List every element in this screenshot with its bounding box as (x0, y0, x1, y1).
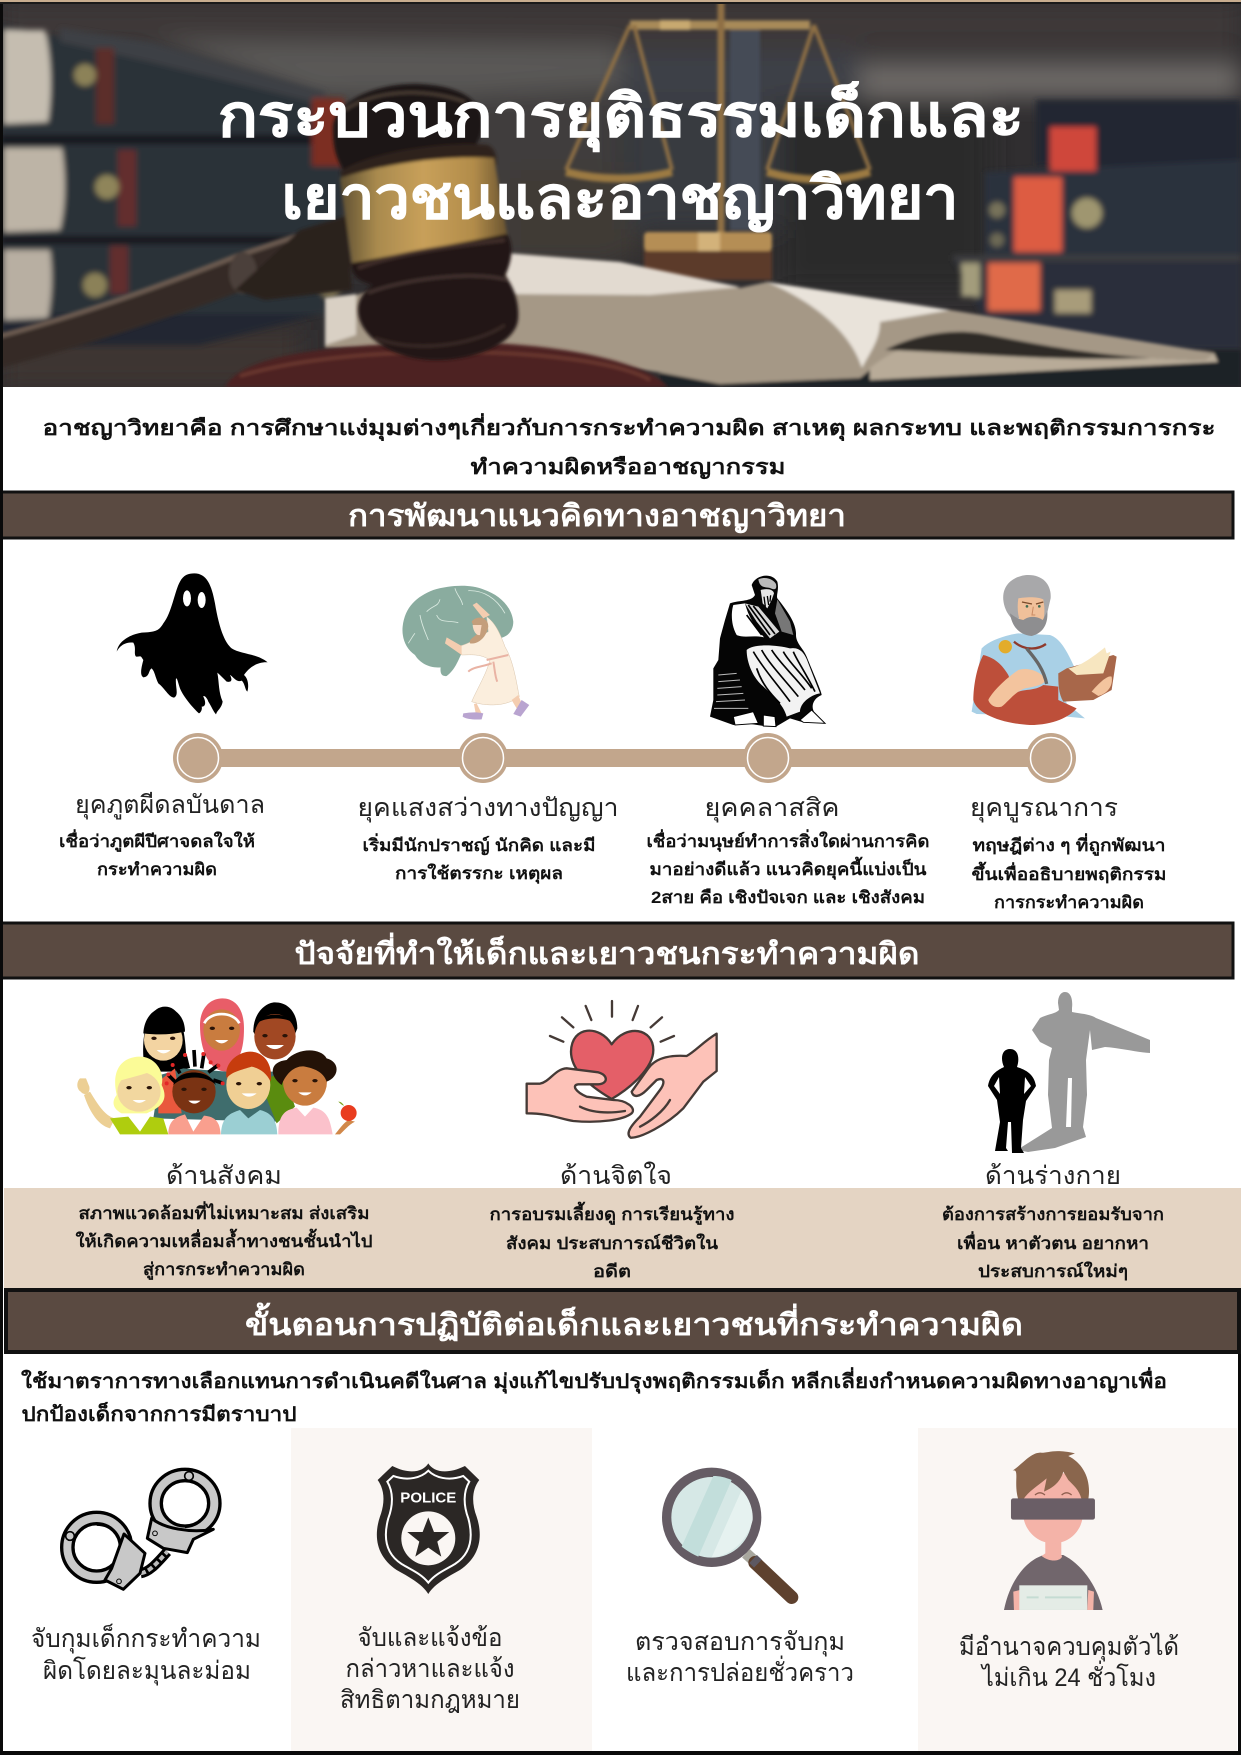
social description: สู่การกระทำความผิด (143, 1260, 305, 1281)
era 1 text: กระทำความผิด (97, 860, 217, 879)
title: เยาวชนและอาชญาวิทยา (282, 166, 958, 232)
band: factor descriptions (4, 1188, 1241, 1288)
icon: seated classical philosopher statue (710, 576, 825, 727)
milestone 1 (173, 733, 223, 783)
milestone 3 (743, 733, 793, 783)
step 4 label (959, 1632, 1179, 1692)
step 1 label: ผิดโดยละมุนละม่อม (43, 1656, 251, 1686)
heading: concept development: การพัฒนาแนวคิดทางอาชญาวิทยา (348, 500, 846, 534)
step 4 label: มีอำนาจควบคุมตัวได้ (959, 1632, 1179, 1662)
intro text: ทำความผิดหรืออาชญากรรม (470, 455, 786, 480)
title (218, 81, 1024, 232)
open book (325, 253, 1241, 387)
icon: child with superhero shadow (988, 992, 1150, 1153)
icon: police badge (377, 1463, 480, 1594)
icon: person pushing a brain (402, 586, 529, 720)
label: physical: ด้านร่างกาย (985, 1162, 1121, 1190)
heading: factors: ปัจจัยที่ทำให้เด็กและเยาวชนกระทำความผิด (294, 932, 920, 971)
icon: ancient scholar with book and quill (972, 575, 1117, 725)
era 4 text: ขึ้นเพื่ออธิบายพฤติกรรม (972, 861, 1166, 884)
era 2 text: ยุคแสงสว่างทางปัญญา (358, 794, 618, 823)
psychological description: สังคม ประสบการณ์ชีวิตใน (506, 1233, 718, 1253)
era 3 text: 2สาย คือ เชิงปัจเจก และ เชิงสังคม (651, 887, 925, 907)
right stacked books (953, 100, 1241, 350)
era 3 text: ยุคคลาสสิค (704, 794, 840, 823)
era 4 text: ทฤษฎีต่าง ๆ ที่ถูกพัฒนา (972, 833, 1166, 857)
icon: hands giving a heart (527, 1001, 717, 1138)
intro paragraph (21, 1366, 1167, 1426)
social description (76, 1201, 373, 1281)
era 3 text: มาอย่างดีแล้ว แนวคิดยุคนี้แบ่งเป็น (650, 856, 927, 880)
heading: procedures (6, 1290, 1239, 1352)
psychological description: การอบรมเลี้ยงดู การเรียนรู้ทาง (490, 1201, 734, 1226)
era 3 text: เชื่อว่ามนุษย์ทำการสิ่งใดผ่านการคิด (646, 829, 930, 852)
panel: procedures for young offenders (6, 1290, 1239, 1751)
step 3 label: ตรวจสอบการจับกุม (635, 1628, 845, 1657)
icon: police badge: POLICE (400, 1490, 457, 1506)
step 2 label: กล่าวหาและแจ้ง (346, 1655, 514, 1683)
physical description: เพื่อน หาตัวตน อยากหา (957, 1231, 1149, 1253)
era 3 text (646, 794, 930, 907)
heading: concept development (0, 492, 1233, 538)
gavel (0, 84, 518, 368)
intro paragraph: ปกป้องเด็กจากการมีตราบาป (22, 1401, 296, 1426)
label: social: ด้านสังคม (166, 1162, 282, 1190)
label: psychological: ด้านจิตใจ (560, 1161, 672, 1190)
psychological description (490, 1201, 734, 1281)
intro paragraph: ใช้มาตราการทางเลือกแทนการดำเนินคดีในศาล มุ่งแก้ไขปรับปรุงพฤติกรรมเด็ก หลีกเลี่ยงกำหนดความผิดทางอาญาเพื่อ (21, 1366, 1167, 1394)
step card backgrounds (291, 1428, 1237, 1751)
brass scales in background (566, 0, 870, 280)
era 1 text: เชื่อว่าภูตผีปีศาจดลใจให้ (59, 829, 255, 853)
physical description: ต้องการสร้างการยอมรับจาก (942, 1205, 1164, 1224)
era 4 text: การกระทำความผิด (994, 893, 1144, 912)
panel: development of criminology concepts (0, 492, 1233, 912)
step 2 label (340, 1624, 520, 1714)
heading: factors (0, 923, 1233, 978)
icon: handcuffs (66, 1472, 214, 1589)
step 4 label: ไม่เกิน 24 ชั่วโมง (980, 1660, 1156, 1692)
era 2 text: เริ่มมีนักปราชญ์ นักคิด และมี (362, 833, 596, 856)
social description: สภาพแวดล้อมที่ไม่เหมาะสม ส่งเสริม (78, 1201, 370, 1223)
physical description (942, 1205, 1164, 1281)
milestone 2 (458, 733, 508, 783)
psychological description: อดีต (593, 1261, 631, 1281)
step 2 label: สิทธิตามกฎหมาย (340, 1686, 520, 1714)
era 1 text: ยุคภูตผีดลบันดาล (75, 791, 265, 820)
left stacked books (0, 24, 345, 345)
intro text: อาชญาวิทยาคือ การศึกษาแง่มุมต่างๆเกี่ยวกับการกระทำความผิด สาเหตุ ผลกระทบ และพฤติกรรมการกระ (42, 412, 1216, 442)
intro text (42, 412, 1216, 480)
social description: ให้เกิดความเหลื่อมล้ำทางชนชั้นนำไป (76, 1228, 373, 1251)
icon: diverse group of children (77, 998, 357, 1134)
icon: magnifying glass (667, 1472, 792, 1597)
era 2 text: การใช้ตรรกะ เหตุผล (395, 863, 563, 884)
era 4 text: ยุคบูรณาการ (970, 794, 1118, 823)
icon: ghost (117, 573, 268, 714)
era 4 text (970, 794, 1166, 912)
milestone 4 (1026, 733, 1076, 783)
hero photo: gavel, scales and law books (0, 0, 1241, 390)
timeline (173, 733, 1076, 783)
panel: factors causing youth offending (0, 923, 1241, 1288)
step 3 label (626, 1628, 854, 1687)
sound block (225, 342, 668, 387)
step 1 label (31, 1623, 261, 1686)
era 1 text (59, 791, 265, 879)
step 3 label: และการปล่อยชั่วคราว (626, 1655, 854, 1687)
physical description: ประสบการณ์ใหม่ๆ (978, 1261, 1128, 1281)
title: กระบวนการยุติธรรมเด็กและ (218, 81, 1024, 153)
heading: procedures: ขั้นตอนการปฏิบัติต่อเด็กและเยาวชนที่กระทำความผิด (245, 1302, 1023, 1342)
step 2 label: จับและแจ้งข้อ (358, 1624, 502, 1652)
icon: detained person holding a placard (1004, 1451, 1103, 1610)
era 2 text (358, 794, 618, 884)
step 1 label: จับกุมเด็กกระทำความ (31, 1623, 261, 1654)
